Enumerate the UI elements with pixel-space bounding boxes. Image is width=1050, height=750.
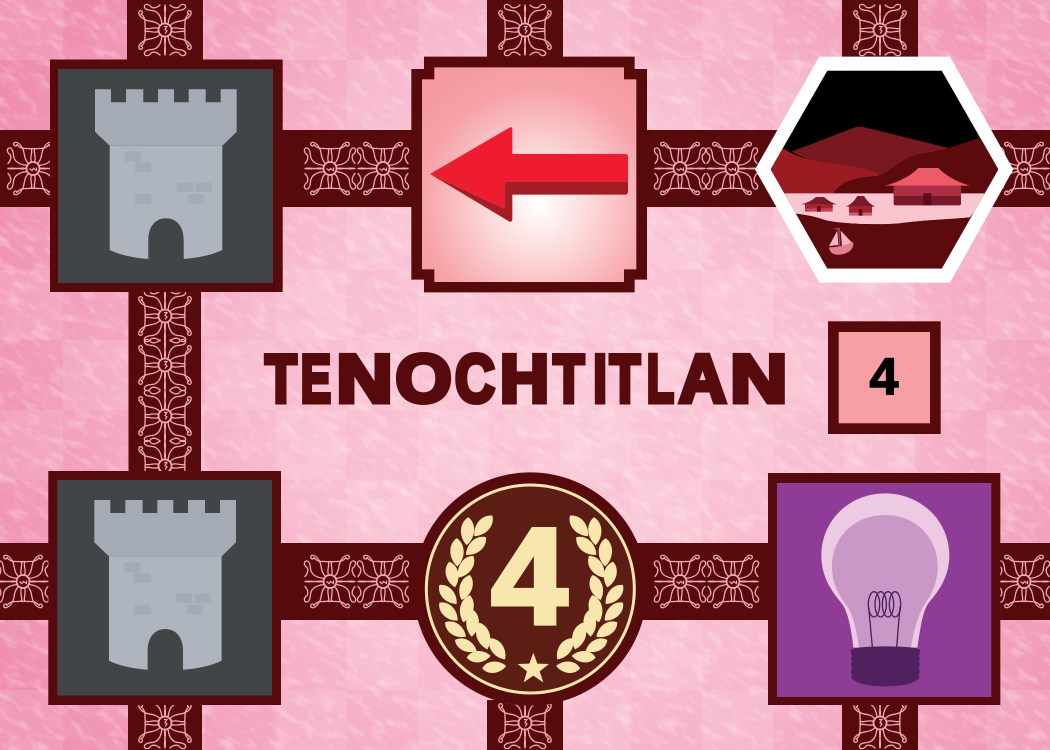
heading: city name: O [396, 341, 452, 417]
heading: city name: L [647, 341, 674, 417]
badge: population value: 4 [870, 348, 899, 406]
medal: victory points with laurel wreath [414, 472, 647, 706]
wreath right [552, 511, 627, 674]
heading: city name: T [610, 341, 640, 417]
heading: city name: C [455, 341, 495, 417]
icon: tower [94, 500, 236, 670]
star [518, 653, 549, 682]
icon: red left arrow [430, 127, 628, 222]
icon: tower [95, 89, 237, 259]
heading: city name: H [500, 341, 549, 417]
tile: purple light bulb [768, 473, 1000, 705]
heading: city name: T [553, 341, 584, 417]
heading: city name: N [730, 341, 787, 417]
sailboat [829, 228, 853, 255]
icon: light bulb [821, 493, 949, 686]
tile: hexagon city scene [755, 57, 1013, 283]
big house [885, 168, 970, 205]
heading: city name: I [593, 341, 607, 417]
heading: city name: T [265, 341, 297, 417]
tile: direction arrow [411, 57, 647, 292]
wreath left [435, 511, 510, 674]
small house right [846, 196, 875, 216]
tile: top-left tower [50, 60, 283, 292]
small house left [801, 197, 837, 212]
badge: population value [828, 321, 941, 434]
heading: city name: E [301, 341, 331, 417]
heading: city name: A [679, 341, 726, 417]
heading: city name: N [336, 341, 392, 417]
medal number: 4 [491, 499, 567, 652]
tile: bottom-left tower [48, 471, 281, 705]
